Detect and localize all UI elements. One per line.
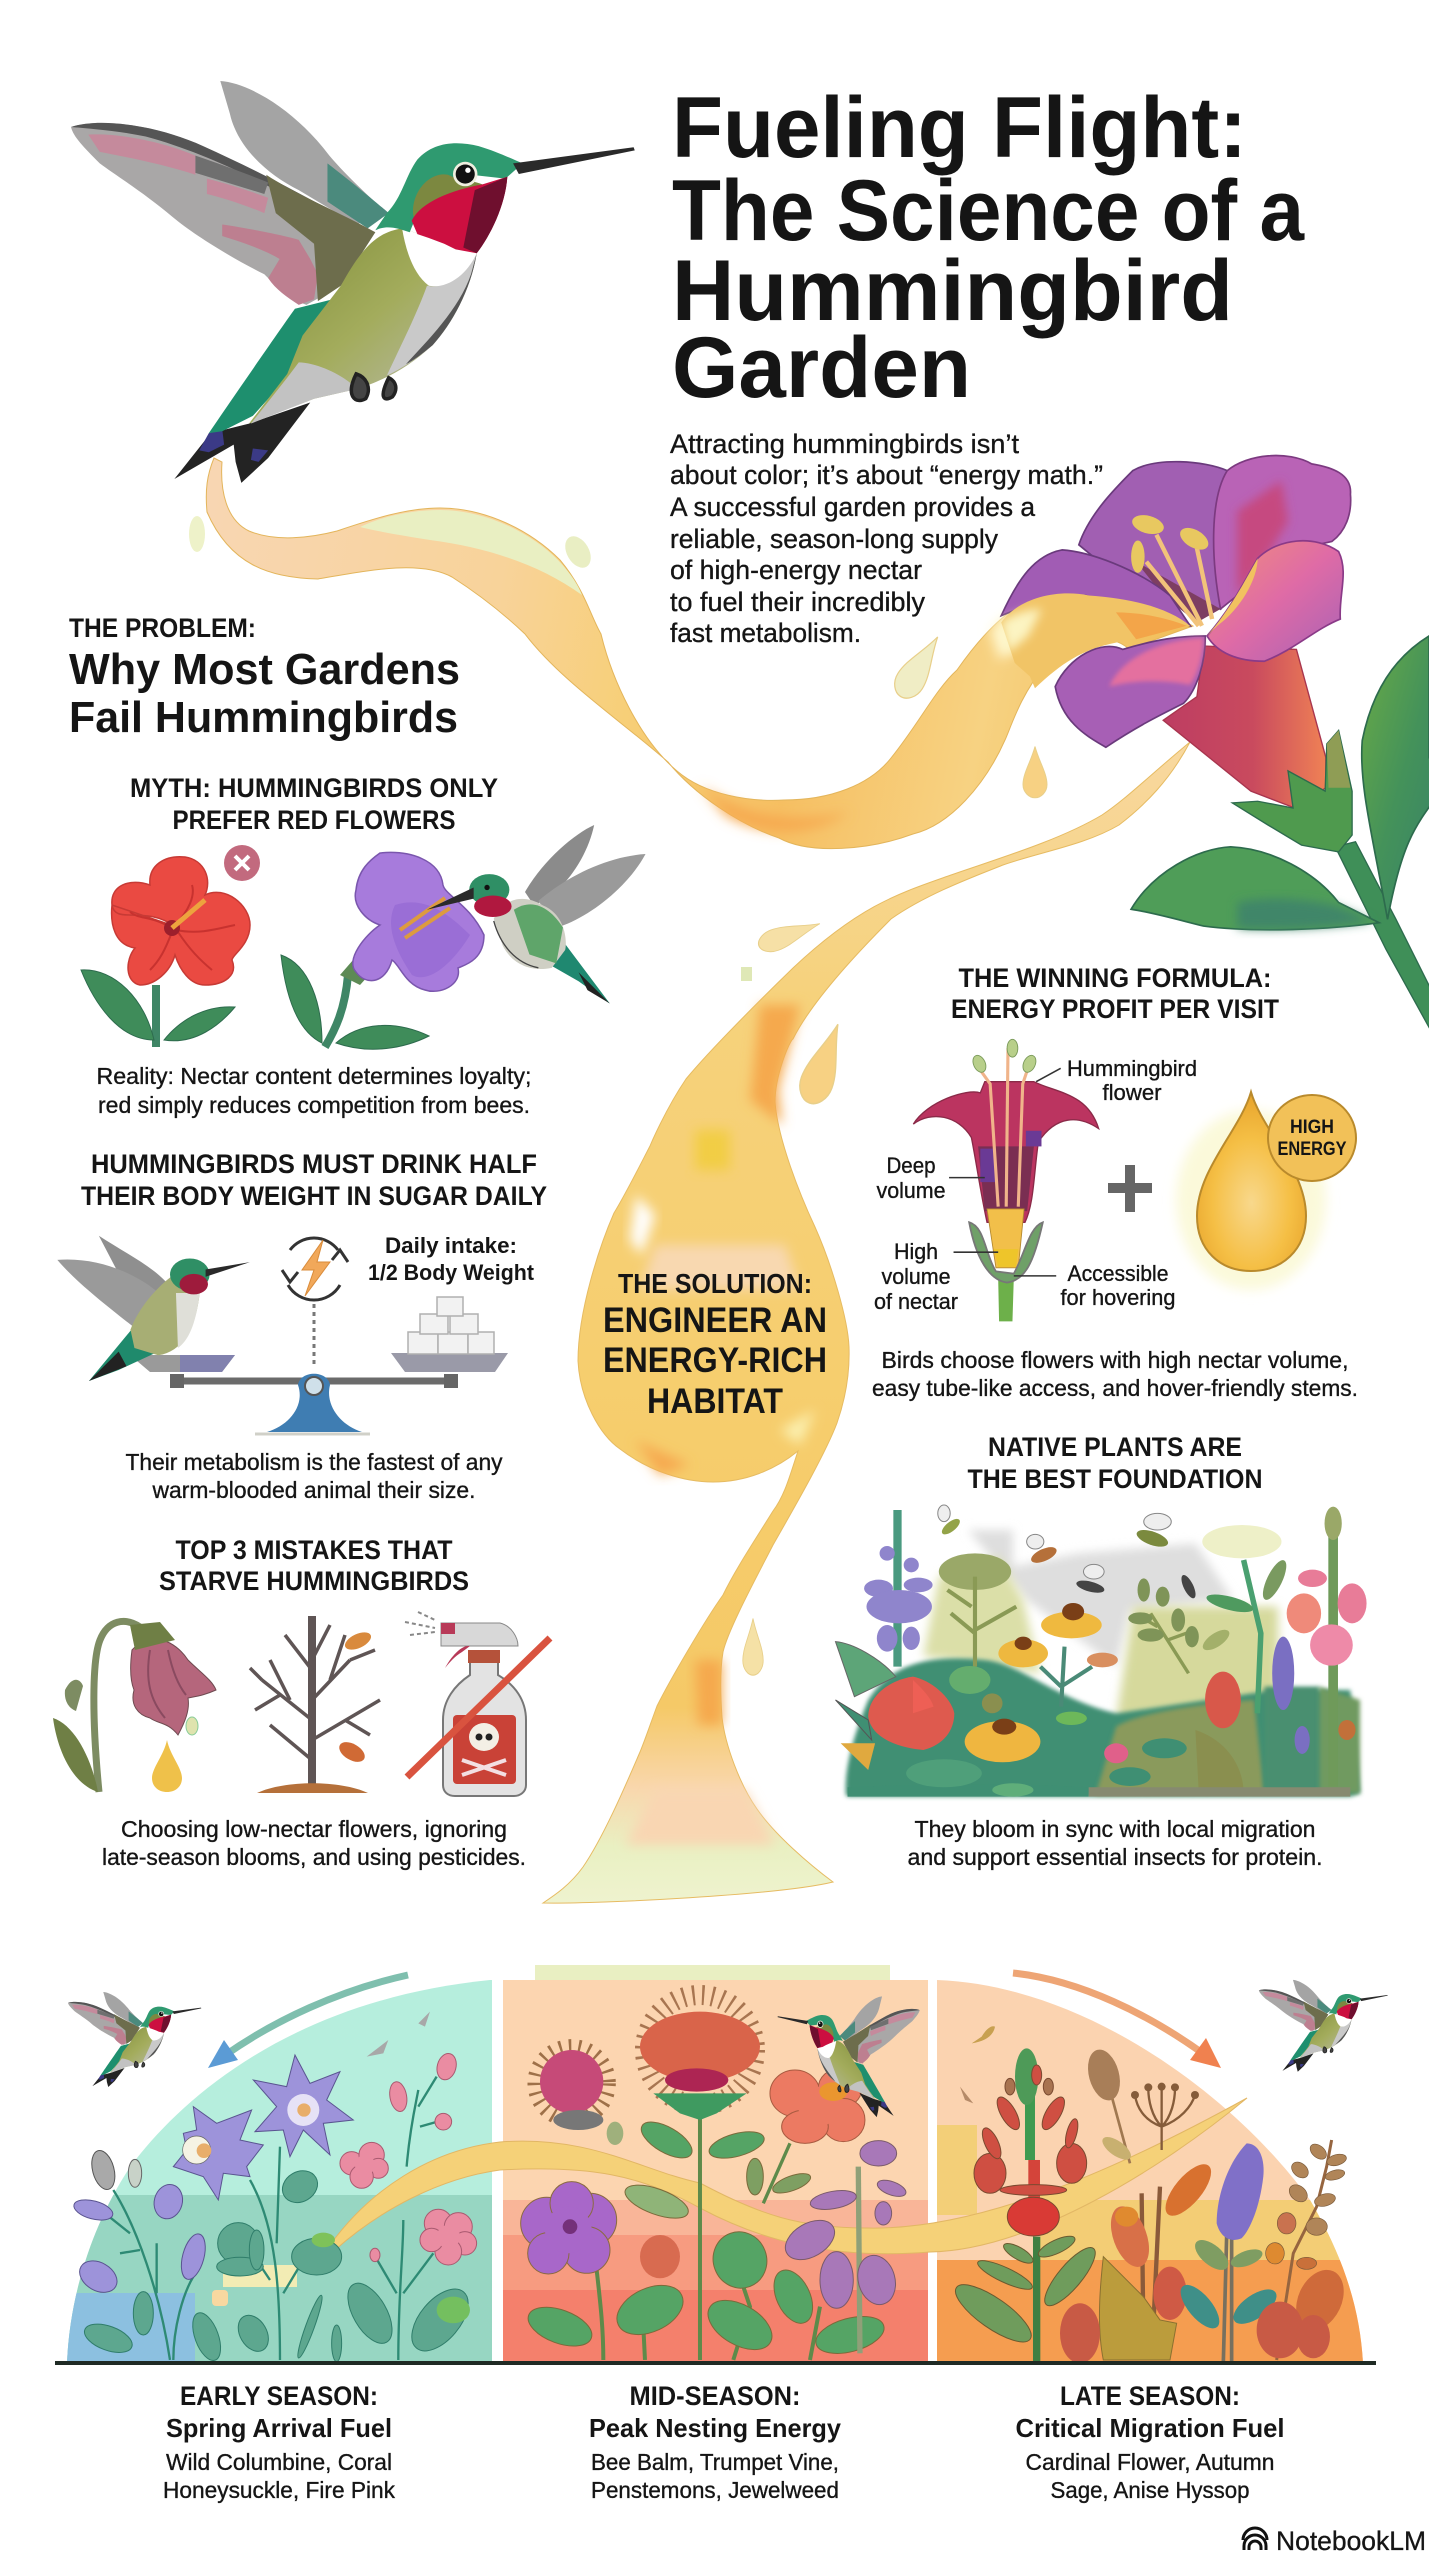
icon: red hibiscus	[81, 857, 250, 1047]
seasonal background panels	[60, 1975, 1370, 2370]
title: Fueling Flight:	[672, 80, 1247, 176]
icon: sugar cubes	[408, 1297, 494, 1354]
arrow: spring migration	[208, 1975, 408, 2068]
heading: THEIR BODY WEIGHT IN SUGAR DAILY	[81, 1181, 547, 1211]
icon: hummingbird at flower	[427, 825, 646, 1004]
arrow: fall migration	[1013, 1973, 1221, 2068]
intro paragraph: of high-energy nectar	[670, 555, 922, 585]
mid season caption: Peak Nesting Energy	[589, 2413, 842, 2443]
illustration: native garden	[835, 1505, 1367, 1797]
heading	[159, 1535, 469, 1596]
diagram labels: volume	[876, 1178, 946, 1203]
diagram labels	[874, 1056, 1197, 1314]
small hummingbird: early season	[68, 1992, 201, 2087]
heading: THE BEST FOUNDATION	[968, 1464, 1262, 1494]
trumpet flower with stem and leaves	[1001, 456, 1429, 1027]
intro paragraph: fast metabolism.	[670, 618, 861, 648]
solution drop text: THE SOLUTION:	[618, 1268, 812, 1299]
heading: the problem: Fail Hummingbirds	[69, 693, 458, 742]
panel: top 3 mistakes	[53, 1535, 550, 1870]
native plants text: and support essential insects for protein.	[908, 1844, 1322, 1870]
pale top band of mid season	[535, 1965, 890, 1980]
mid season caption	[589, 2381, 842, 2503]
panel: half body weight in sugar	[57, 1149, 547, 1503]
title	[672, 80, 1305, 416]
notebooklm logo: NotebookLM	[1276, 2526, 1426, 2556]
solution drop text	[603, 1268, 827, 1421]
heading: the problem	[69, 613, 460, 742]
large hummingbird	[71, 81, 635, 483]
icon: pesticide spray with strike	[405, 1612, 550, 1796]
nectar droplets	[189, 516, 1047, 1675]
mid season caption: MID-SEASON:	[630, 2381, 800, 2411]
diagram labels: flower	[1102, 1080, 1162, 1105]
diagram labels: Hummingbird	[1067, 1056, 1197, 1081]
early season caption	[163, 2381, 395, 2503]
metabolism text: warm-blooded animal their size.	[152, 1477, 476, 1503]
diagram labels: volume	[882, 1264, 950, 1289]
heading: the problem: Why Most Gardens	[69, 645, 460, 694]
title: Hummingbird	[672, 243, 1233, 339]
heading: ENERGY PROFIT PER VISIT	[951, 994, 1279, 1024]
myth heading: PREFER RED FLOWERS	[172, 805, 456, 835]
icon: plus	[1108, 1165, 1152, 1212]
reality text: Reality: Nectar content determines loyalty;	[96, 1063, 532, 1089]
late season caption: Critical Migration Fuel	[1016, 2413, 1284, 2443]
myth heading	[130, 773, 498, 835]
icon: bare tree	[250, 1616, 380, 1793]
icon: scale	[130, 1304, 508, 1434]
late season caption: LATE SEASON:	[1060, 2381, 1240, 2411]
diagram: flower cross-section	[913, 1039, 1099, 1321]
heading: NATIVE PLANTS ARE	[988, 1432, 1242, 1462]
icon: golden high energy drop: HIGH	[1290, 1117, 1334, 1138]
nectar stream: hummingbird to flower	[206, 458, 1193, 849]
panel: native plants	[835, 1432, 1367, 1870]
mistakes text	[102, 1816, 526, 1870]
formula text	[872, 1347, 1358, 1401]
early season caption: Spring Arrival Fuel	[166, 2413, 392, 2443]
native plants text: They bloom in sync with local migration	[914, 1816, 1316, 1842]
daily intake label	[368, 1233, 535, 1285]
heading	[81, 1149, 547, 1211]
mistakes text: late-season blooms, and using pesticides.	[102, 1844, 526, 1870]
formula text: easy tube-like access, and hover-friendly stems.	[872, 1375, 1358, 1401]
solution drop text: ENGINEER AN	[603, 1301, 827, 1340]
heading: STARVE HUMMINGBIRDS	[159, 1566, 469, 1596]
metabolism text: Their metabolism is the fastest of any	[126, 1449, 503, 1475]
late season caption: Sage, Anise Hyssop	[1050, 2477, 1250, 2503]
heading	[968, 1432, 1262, 1494]
heading: TOP 3 MISTAKES THAT	[176, 1535, 453, 1565]
solution drop text: HABITAT	[647, 1382, 783, 1421]
mid season caption: Penstemons, Jewelweed	[591, 2477, 839, 2503]
energy ribbon across seasons	[212, 2098, 1247, 2306]
heading: the problem: THE PROBLEM:	[69, 613, 256, 643]
title: The Science of a	[672, 163, 1305, 259]
intro paragraph	[670, 429, 1103, 648]
nectar stream: falling into solution drop and tail	[543, 742, 1190, 1903]
solution drop text: ENERGY-RICH	[603, 1341, 827, 1380]
early season caption: EARLY SEASON:	[180, 2381, 378, 2411]
small hummingbird: mid season	[778, 1996, 920, 2117]
ground line	[55, 2361, 1376, 2365]
title: Garden	[672, 320, 971, 416]
intro paragraph: to fuel their incredibly	[670, 587, 925, 617]
myth heading: MYTH: HUMMINGBIRDS ONLY	[130, 773, 498, 803]
native plants text	[908, 1816, 1322, 1870]
heading: THE WINNING FORMULA:	[958, 963, 1272, 993]
diagram labels: Accessible	[1068, 1261, 1168, 1286]
early season plants	[72, 2012, 479, 2364]
daily intake label: 1/2 Body Weight	[368, 1260, 535, 1285]
icon: x badge	[224, 845, 260, 881]
intro paragraph: Attracting hummingbirds isn’t	[670, 429, 1019, 459]
early season caption: Wild Columbine, Coral	[166, 2449, 392, 2475]
intro paragraph: reliable, season-long supply	[670, 524, 998, 554]
metabolism text	[126, 1449, 503, 1503]
panel: winning formula	[872, 963, 1358, 1401]
early season caption: Honeysuckle, Fire Pink	[163, 2477, 395, 2503]
diagram labels: of nectar	[874, 1289, 958, 1314]
diagram labels: High	[894, 1239, 938, 1264]
reality text	[96, 1063, 532, 1118]
diagram labels: Deep	[886, 1153, 936, 1178]
panel: myth red flowers	[81, 773, 646, 1118]
late season plants	[948, 2026, 1353, 2363]
diagram labels: for hovering	[1060, 1285, 1176, 1310]
mid season caption: Bee Balm, Trumpet Vine,	[591, 2449, 839, 2475]
intro paragraph: A successful garden provides a	[670, 492, 1036, 522]
icon: wilted flower	[53, 1621, 216, 1792]
heading: HUMMINGBIRDS MUST DRINK HALF	[91, 1149, 537, 1179]
mistakes text: Choosing low-nectar flowers, ignoring	[121, 1816, 507, 1842]
daily intake label: Daily intake:	[385, 1233, 517, 1258]
reality text: red simply reduces competition from bees.	[98, 1092, 530, 1118]
formula text: Birds choose flowers with high nectar volume,	[882, 1347, 1348, 1373]
late season caption: Cardinal Flower, Autumn	[1026, 2449, 1274, 2475]
late season caption	[1016, 2381, 1284, 2503]
icon: hummingbird on scale	[57, 1236, 250, 1381]
small hummingbird: late season	[1259, 1980, 1388, 2072]
mid season plants	[521, 1995, 908, 2360]
icon: energy cycle	[282, 1238, 348, 1300]
icon: golden high energy drop: ENERGY	[1278, 1139, 1347, 1160]
icon: purple flower	[281, 852, 484, 1049]
icon: golden high energy drop	[1176, 1092, 1356, 1290]
intro paragraph: about color; it’s about “energy math.”	[670, 460, 1103, 490]
heading	[951, 963, 1279, 1024]
